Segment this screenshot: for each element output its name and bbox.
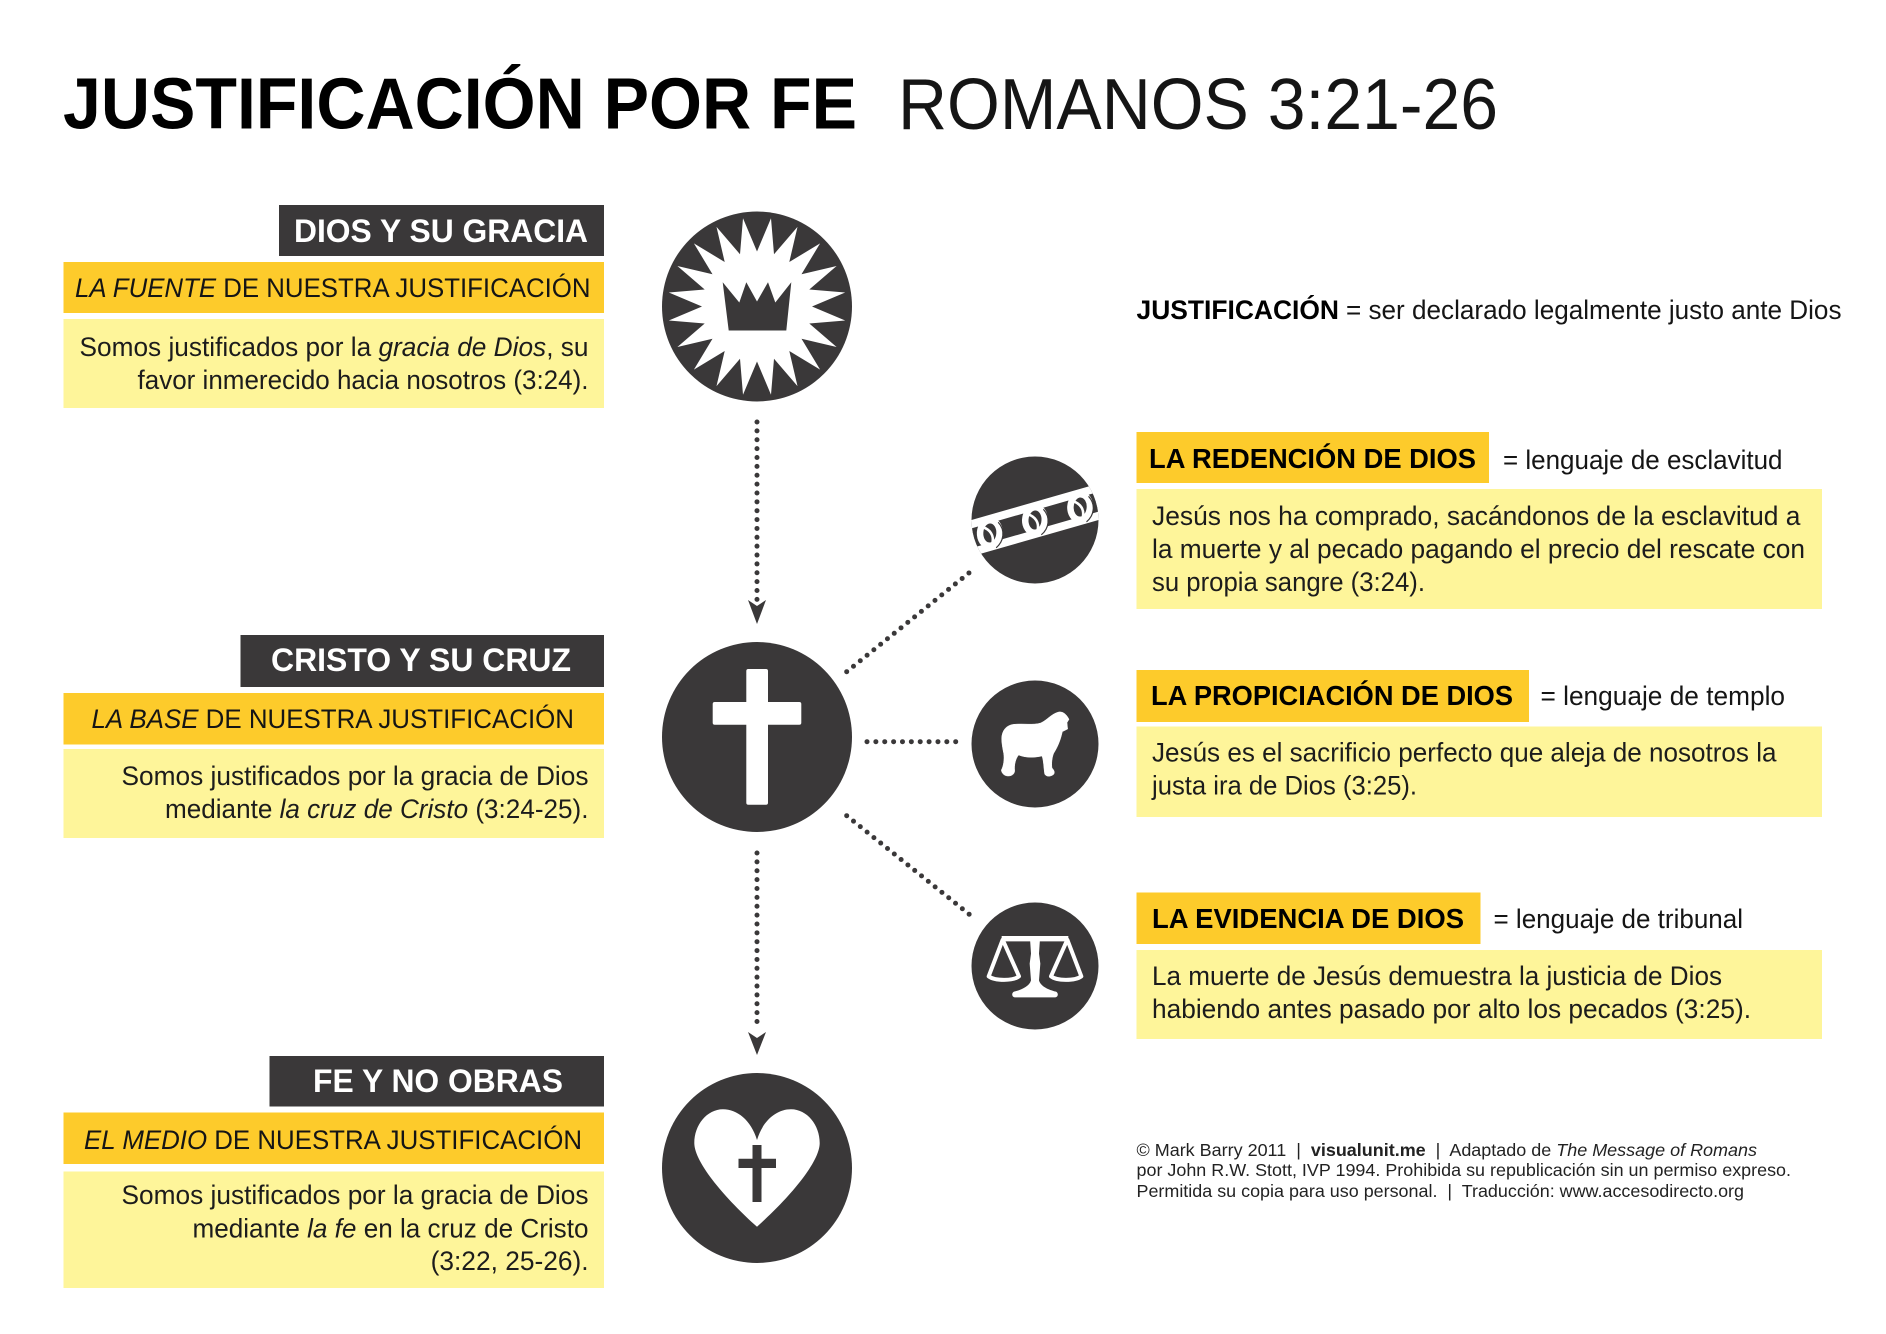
text block: redención (1136, 489, 1822, 609)
footer credits: por John R.W. Stott, IVP 1994. Prohibida su republicación sin un permiso expreso. (1136, 1160, 1791, 1180)
text block: evidencia (1136, 950, 1822, 1039)
text block: propiciación (1136, 726, 1822, 817)
label: lenguaje de templo: = lenguaje de templo (1540, 681, 1785, 711)
subheading: el medio (64, 1112, 604, 1164)
heading: Fe y no obras (270, 1056, 604, 1106)
subheading: la base: LA BASE DE NUESTRA JUSTIFICACIÓN (92, 703, 574, 734)
text block: gracia: Somos justificados por la gracia de Dios, su (80, 332, 588, 362)
title: JUSTIFICACIÓN POR FE (63, 64, 857, 144)
text block: fe: Somos justificados por la gracia de Dios (122, 1180, 588, 1210)
text block: evidencia: La muerte de Jesús demuestra la justicia de Dios (1152, 961, 1722, 991)
panel: Fe y no obras (64, 1056, 604, 1288)
icon: lamb (972, 680, 1098, 808)
heading: la evidencia: LA EVIDENCIA DE DIOS (1152, 903, 1464, 934)
text block: redención: Jesús nos ha comprado, sacándonos de la esclavitud a (1152, 501, 1801, 531)
panel: la propiciación de Dios (1136, 670, 1822, 817)
connector: cross to scales (847, 816, 970, 914)
text block: cruz (64, 749, 604, 838)
subheading: el medio: EL MEDIO DE NUESTRA JUSTIFICACIÓN (84, 1124, 582, 1155)
subheading: la fuente: LA FUENTE DE NUESTRA JUSTIFICACIÓN (75, 272, 590, 303)
heading: la propiciación (1136, 670, 1529, 722)
subheading: la base (64, 693, 604, 744)
definition: justificación (1136, 294, 1842, 325)
heading: la redención: LA REDENCIÓN DE DIOS (1149, 443, 1476, 474)
heading: Cristo y su cruz: CRISTO Y SU CRUZ (271, 642, 571, 678)
text block: gracia: favor inmerecido hacia nosotros (3:24). (138, 365, 588, 395)
icon: cross (662, 642, 852, 832)
footer credits (1136, 1140, 1791, 1201)
definition: justificación: JUSTIFICACIÓN (1136, 294, 1339, 325)
footer credits: © Mark Barry 2011 | visualunit.me | Adaptado de The Message of Romans (1136, 1140, 1757, 1160)
panel: Cristo y su cruz (64, 635, 604, 838)
text block: redención: su propia sangre (3:24). (1152, 567, 1425, 597)
text block: fe: mediante la fe en la cruz de Cristo (192, 1214, 588, 1244)
title (63, 64, 1498, 145)
heading: la propiciación: LA PROPICIACIÓN DE DIOS (1151, 680, 1513, 711)
text block: redención: la muerte y al pecado pagando el precio del rescate con (1152, 534, 1805, 564)
connector: cross to lamb (867, 739, 956, 744)
heading: Fe y no obras: FE Y NO OBRAS (313, 1063, 563, 1099)
connector: cross to chain (847, 572, 970, 672)
text block: cruz: Somos justificados por la gracia de Dios (122, 761, 588, 791)
text block: cruz: mediante la cruz de Cristo (3:24-25). (165, 794, 588, 824)
text block: propiciación: justa ira de Dios (3:25). (1151, 770, 1417, 800)
arrow: Cristo to fe (748, 853, 766, 1055)
panel: Dios y su gracia (64, 205, 604, 408)
icon: chain (972, 456, 1098, 584)
heading: Dios y su gracia: DIOS Y SU GRACIA (294, 213, 588, 249)
text block: fe: (3:22, 25-26). (431, 1246, 589, 1276)
icon: scales (972, 902, 1098, 1030)
text block: gracia (64, 319, 604, 408)
icon: heart with cross (662, 1073, 852, 1263)
heading: la evidencia (1136, 892, 1480, 944)
definition: justificación: = ser declarado legalmente justo ante Dios (1346, 295, 1842, 325)
text block: propiciación: Jesús es el sacrificio perfecto que aleja de nosotros la (1152, 738, 1777, 768)
heading: la redención (1136, 432, 1489, 483)
arrow: Dios to Cristo (748, 422, 766, 624)
panel: la evidencia de Dios (1136, 892, 1822, 1039)
text block: evidencia: habiendo antes pasado por alto los pecados (3:25). (1152, 994, 1751, 1024)
label: lenguaje de esclavitud: = lenguaje de esclavitud (1503, 445, 1782, 475)
icon: crown in sunburst (662, 212, 852, 402)
footer credits: Permitida su copia para uso personal. | Traducción: www.accesodirecto.org (1136, 1181, 1744, 1201)
subheading: la fuente (64, 262, 604, 313)
label: lenguaje de tribunal: = lenguaje de tribunal (1494, 904, 1743, 934)
title: ROMANOS 3:21-26 (898, 65, 1498, 145)
panel: la redención de Dios (1136, 432, 1822, 609)
heading: Dios y su gracia (279, 205, 604, 256)
heading: Cristo y su cruz (240, 635, 604, 687)
text block: fe (64, 1172, 604, 1288)
